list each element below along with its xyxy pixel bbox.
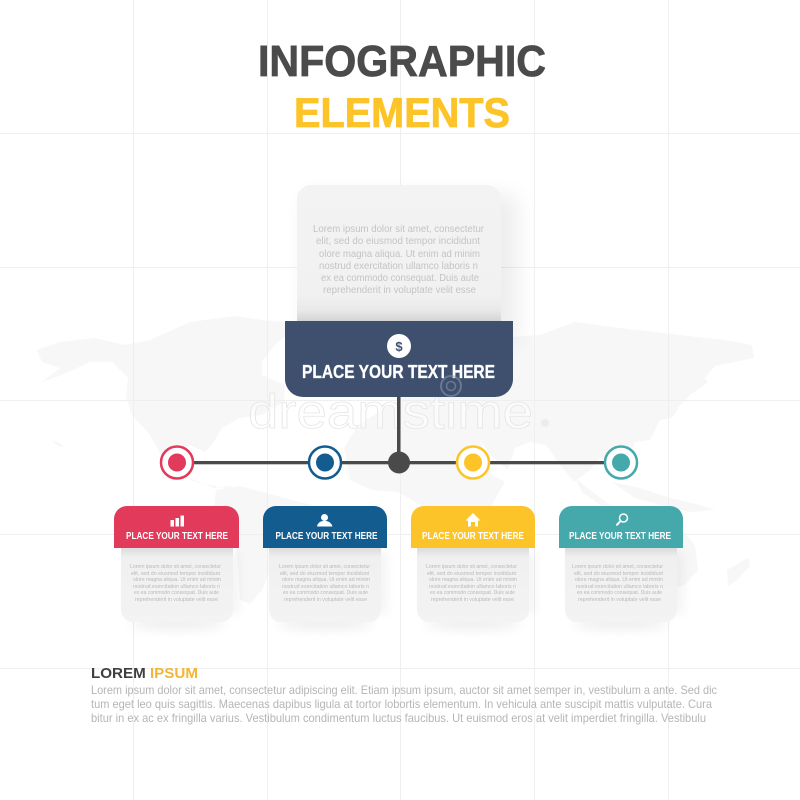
footer paragraph: Lorem ipsum dolor sit amet, consectetur adipiscing elit. Etiam ipsum ipsum, auctor sit amet semper in, vestibulum a ante. Sed dic [91, 683, 717, 697]
teal card header [559, 506, 683, 548]
blue card body text: reprehenderit in voluptate velit esse [284, 597, 367, 603]
teal card body text: ex ea commodo consequat. Duis aute [577, 590, 662, 596]
icon: dollar coin [387, 334, 411, 358]
panel: yellow card [411, 506, 536, 629]
footer paragraph [91, 683, 717, 725]
teal card label: PLACE YOUR TEXT HERE [569, 531, 671, 542]
yellow card body text: ex ea commodo consequat. Duis aute [430, 590, 515, 596]
teal card body text: reprehenderit in voluptate velit esse [578, 597, 661, 603]
connector lines [190, 395, 610, 464]
footer paragraph: bitur in ex ac ex fringilla varius. Vestibulum condimentum luctus faucibus. Ut euismod eros at velit imperdiet fringilla. Vestibulu [91, 711, 706, 725]
teal card body text: nostrud exercitation ullamco laboris n [576, 584, 663, 590]
watermark spiral [441, 376, 461, 396]
panel: red card [114, 506, 240, 629]
teal card body text [572, 564, 663, 603]
blue card body text: ex ea commodo consequat. Duis aute [283, 590, 368, 596]
blue card body text: elit, sed do eiusmod tempor incididunt [280, 571, 369, 577]
blue card header [263, 506, 387, 548]
red card body text: olore magna aliqua. Ut enim ad minim [133, 577, 221, 583]
top card body text: nostrud exercitation ullamco laboris n [319, 260, 478, 272]
blue card body text [279, 564, 370, 603]
world map background [37, 316, 754, 604]
panel: blue card [263, 506, 388, 629]
hub node [388, 452, 410, 474]
yellow card header [411, 506, 535, 548]
yellow card body text: nostrud exercitation ullamco laboris n [429, 584, 516, 590]
teal card body text: Lorem ipsum dolor sit amet, consectetur [572, 564, 663, 570]
top card body text: elit, sed do eiusmod tempor incididunt [316, 235, 480, 247]
red card body text: reprehenderit in voluptate velit esse [135, 597, 218, 603]
blue card label: PLACE YOUR TEXT HERE [276, 531, 378, 542]
main header label: PLACE YOUR TEXT HERE [302, 362, 495, 382]
panel: teal card [559, 506, 684, 629]
icon: magnifier [617, 514, 628, 525]
node: red [161, 446, 193, 478]
icon: dollar coin: $ [395, 339, 403, 354]
footer paragraph: tum eget leo quis sagittis. Maecenas dapibus ligula at tortor lobortis elementum. In vehicula ante suscipit mattis vulputate. Cura [91, 697, 712, 711]
red card body text: Lorem ipsum dolor sit amet, consectetur [130, 564, 221, 570]
node: yellow [457, 446, 489, 478]
blue card body text: nostrud exercitation ullamco laboris n [282, 584, 369, 590]
yellow card body text [426, 564, 517, 603]
title line: infographic: INFOGRAPHIC [258, 37, 546, 86]
panel: main navy header [285, 321, 513, 397]
footer heading: LOREM IPSUM [91, 665, 198, 682]
red card header [114, 506, 239, 548]
top card body text: Lorem ipsum dolor sit amet, consectetur [313, 223, 484, 235]
title line: elements: ELEMENTS [294, 89, 510, 136]
yellow card body text: olore magna aliqua. Ut enim ad minim [429, 577, 517, 583]
top card body text [313, 223, 484, 296]
yellow card label: PLACE YOUR TEXT HERE [422, 531, 524, 542]
icon: house [466, 513, 480, 526]
title [258, 37, 546, 136]
node: teal [605, 446, 637, 478]
yellow card body text: reprehenderit in voluptate velit esse [431, 597, 514, 603]
top card body text: ex ea commodo consequat. Duis aute [321, 272, 479, 284]
teal card body text: elit, sed do eiusmod tempor incididunt [574, 571, 663, 577]
yellow card body text: Lorem ipsum dolor sit amet, consectetur [426, 564, 517, 570]
red card body text: elit, sed do eiusmod tempor incididunt [131, 571, 220, 577]
blue card body text: olore magna aliqua. Ut enim ad minim [282, 577, 370, 583]
red card label: PLACE YOUR TEXT HERE [126, 531, 228, 542]
watermark: dreamstime [248, 386, 533, 439]
top card body text: olore magna aliqua. Ut enim ad minim [319, 248, 480, 260]
red card body text [130, 564, 221, 603]
blue card body text: Lorem ipsum dolor sit amet, consectetur [279, 564, 370, 570]
icon: person [317, 514, 332, 526]
icon: bar chart [170, 516, 184, 526]
top card body text: reprehenderit in voluptate velit esse [323, 284, 476, 296]
teal card body text: olore magna aliqua. Ut enim ad minim [575, 577, 663, 583]
yellow card body text: elit, sed do eiusmod tempor incididunt [427, 571, 516, 577]
panel: top text card [297, 185, 517, 345]
node: blue [309, 446, 341, 478]
red card body text: nostrud exercitation ullamco laboris n [133, 584, 220, 590]
red card body text: ex ea commodo consequat. Duis aute [134, 590, 219, 596]
